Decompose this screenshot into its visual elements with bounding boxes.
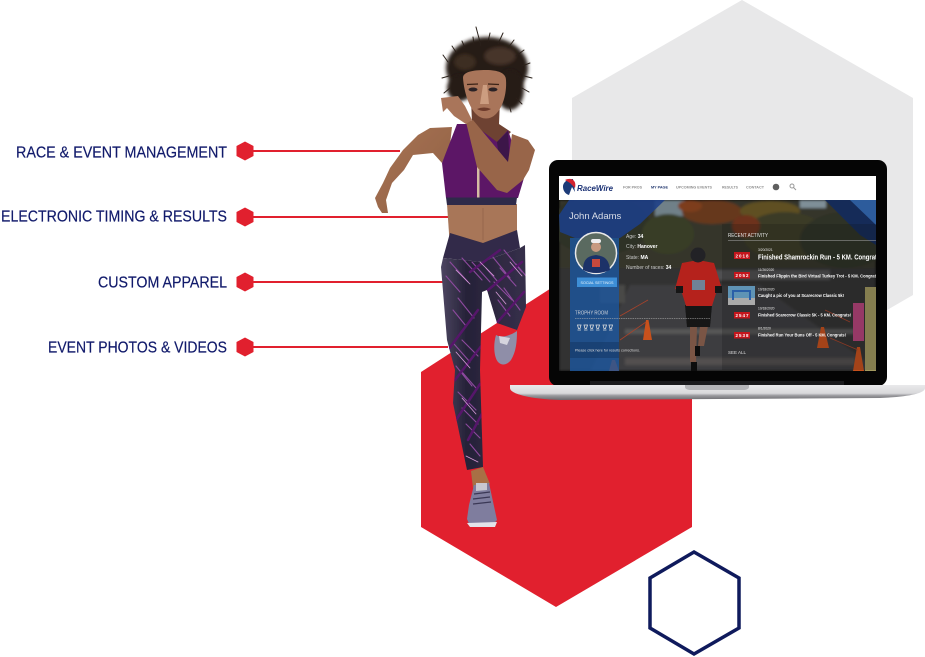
profile: 2052	[736, 273, 749, 278]
face	[463, 70, 506, 118]
label: race and event management	[16, 142, 400, 162]
laptop screen	[550, 176, 890, 371]
profile: Caught a pic of you at Scarecrow Classic 5k!	[758, 293, 845, 298]
nav links: FOR PROS	[623, 184, 642, 190]
left arm	[375, 127, 452, 213]
activity items: 3/20/2021	[758, 248, 773, 252]
logo: RaceWire	[577, 184, 614, 193]
finish arch	[559, 200, 665, 238]
hair	[442, 27, 532, 112]
logo	[563, 179, 614, 195]
ankle	[471, 467, 490, 488]
navy outline hexagon	[650, 552, 739, 654]
activity items	[758, 248, 775, 330]
nav links: UPCOMING EVENTS	[676, 184, 712, 190]
label: custom apparel	[98, 272, 443, 292]
leggings	[441, 245, 526, 470]
label: event photos and videos	[48, 338, 448, 356]
profile: Finished Scarecrow Classic 5K - 5 KM. Congrats!	[758, 312, 852, 318]
photo runner	[675, 248, 722, 371]
legging pattern	[446, 250, 526, 462]
profile: Finished Flippin the Bird Virtual Turkey Trot - 5 KM. Congrat	[758, 274, 877, 278]
purple top	[442, 124, 524, 198]
bent arm	[466, 120, 535, 193]
front shoe	[467, 483, 497, 527]
profile: Finished Run Your Buns Off - 5 KM. Congrats!	[758, 332, 847, 338]
profile: 2538	[736, 333, 749, 338]
info icon	[773, 184, 779, 190]
profile: TROPHY ROOM	[575, 310, 608, 316]
profile: SOCIAL SETTINGS	[580, 281, 614, 285]
profile: Finished Shamrockin Run - 5 KM. Congrat	[758, 254, 878, 262]
eyes and mouth	[467, 84, 499, 111]
profile: Number of races: 34	[626, 265, 672, 271]
laptop base	[510, 385, 925, 400]
profile: Please click here for results corrections.	[575, 348, 640, 352]
activity badges	[734, 252, 750, 338]
nav links	[623, 186, 764, 188]
label: electronic timing and results: ELECTRONIC TIMING & RESULTS	[1, 208, 227, 226]
nav links: RESULTS	[722, 184, 738, 190]
profile: State: MA	[626, 255, 649, 261]
trophies	[578, 325, 612, 330]
search icon	[790, 184, 796, 190]
label: electronic timing and results	[1, 208, 450, 226]
gray hexagon	[572, 0, 913, 394]
nav bar	[559, 176, 876, 200]
top band	[446, 198, 517, 205]
recent activity: RECENT ACTIVITY	[728, 233, 768, 239]
avatar	[576, 232, 616, 274]
profile: 2018	[736, 254, 749, 258]
activity items: 11/26/2020	[758, 268, 774, 272]
neck	[466, 100, 511, 146]
nav links: MY PAGE	[651, 184, 668, 190]
social settings button	[577, 278, 617, 287]
laptop notch	[685, 385, 749, 390]
profile: 2547	[736, 313, 749, 318]
laptop	[510, 160, 925, 400]
hand	[441, 96, 472, 124]
laptop hinge	[590, 381, 844, 385]
label: custom apparel: CUSTOM APPAREL	[98, 274, 227, 292]
label: race and event management: RACE & EVENT MANAGEMENT	[16, 144, 227, 162]
profile: Age: 34	[626, 234, 643, 240]
profile	[569, 211, 878, 356]
cone tape	[620, 300, 858, 350]
blue column and overlay	[570, 238, 619, 371]
photo background	[550, 195, 890, 371]
rear shoe	[494, 331, 517, 364]
runner	[375, 27, 535, 527]
cones	[609, 320, 864, 371]
profile: John Adams	[569, 211, 622, 222]
profile: SEE ALL	[728, 350, 746, 356]
activity items: 10/18/2020	[758, 288, 775, 292]
waistband	[443, 230, 520, 262]
abdomen	[447, 204, 517, 248]
nav links: CONTACT	[746, 184, 765, 190]
service labels	[1, 142, 450, 356]
activity items: 10/18/2020	[758, 306, 775, 310]
red hexagon	[421, 285, 692, 607]
label: event photos and videos: EVENT PHOTOS & VIDEOS	[48, 340, 227, 356]
profile: City: Hanover	[626, 244, 657, 250]
laptop lid	[549, 160, 887, 386]
activity items: 8/1/2020	[758, 326, 771, 330]
activity thumbnail	[728, 286, 755, 298]
side banner	[853, 303, 864, 341]
